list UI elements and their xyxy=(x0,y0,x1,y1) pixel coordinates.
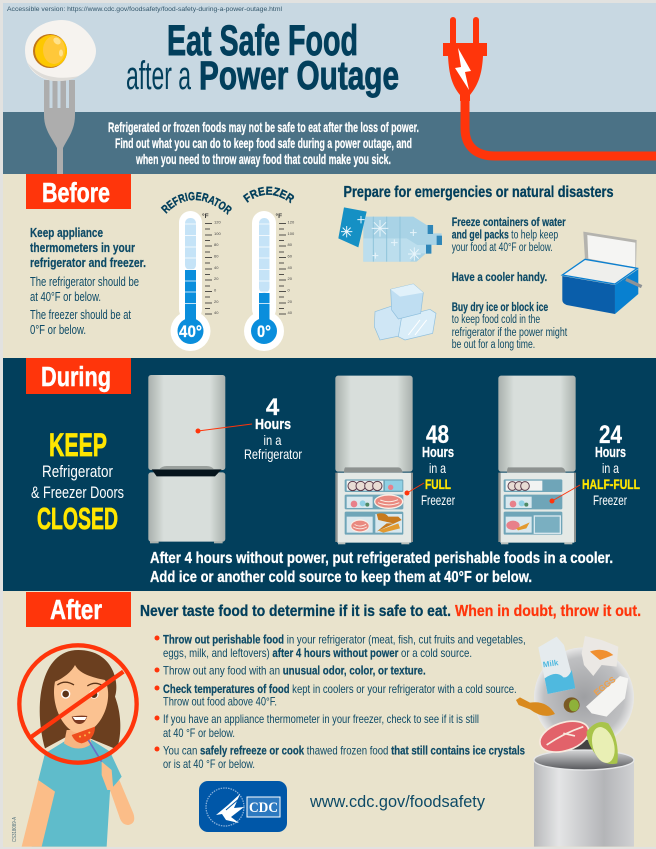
callout: 24 hours half-full freezer: Freezer xyxy=(593,492,627,508)
fish xyxy=(516,697,555,716)
chart: freezer thermometer: °F xyxy=(276,212,282,220)
chart: freezer thermometer: 100 xyxy=(288,231,295,236)
heading: never taste food: Never taste food to determine if it is safe to eat. xyxy=(140,603,451,620)
callout: 48 hours full freezer: FULL xyxy=(425,476,451,492)
illustration: full freezer xyxy=(335,376,413,544)
list: after guidance: Throw out perishable food in your refrigerator (meat, fish, cut fruits and vegetables, xyxy=(163,632,526,646)
text: after 4 hours: Add ice or another cold source to keep them at 40°F or below. xyxy=(150,569,532,586)
icon: frozen bottles and gel pack xyxy=(338,207,442,262)
icon: power plug xyxy=(443,17,656,156)
list: after guidance: If you have an appliance thermometer in your freezer, check to see if it is still xyxy=(163,712,479,726)
callout: 4 hours refrigerator: 4 xyxy=(266,394,280,421)
title: Eat Safe Food xyxy=(167,17,358,65)
link: website: www.cdc.gov/foodsafety xyxy=(309,792,485,811)
heading tab: during: During xyxy=(41,361,111,392)
chart: refrigerator thermometer: 60 xyxy=(214,254,219,258)
text: have a cooler handy: Have a cooler handy. xyxy=(452,270,547,284)
milk carton: Milk xyxy=(542,658,560,669)
callout: 24 hours half-full freezer: 24 xyxy=(599,421,622,449)
chart: refrigerator thermometer: 80 xyxy=(214,242,219,247)
chart: freezer thermometer: FREEZER xyxy=(242,186,294,204)
text: buy dry ice xyxy=(452,302,568,351)
icon: ice cubes xyxy=(374,284,436,340)
illustration: closed refrigerator xyxy=(148,375,225,543)
list: after guidance: at 40 °F or below. xyxy=(163,726,235,740)
intro text: when you need to throw away food that could make you sick. xyxy=(135,151,391,167)
chart: refrigerator thermometer: 20 xyxy=(214,276,219,281)
icon: fork xyxy=(44,80,75,174)
callout: 24 hours half-full freezer xyxy=(550,421,640,508)
intro text: Find out what you can do to keep food safe during a power outage, and xyxy=(115,135,412,151)
text: freeze containers xyxy=(452,217,566,254)
callout: 4 hours refrigerator xyxy=(196,394,302,462)
milk carton xyxy=(538,637,575,694)
takeout box xyxy=(582,636,618,676)
text: buy dry ice: to keep food cold in the xyxy=(452,314,540,326)
text: freeze containers: Freeze containers of water xyxy=(452,217,566,229)
chart: refrigerator thermometer: 20 xyxy=(214,299,219,304)
callout: 48 hours full freezer: 48 xyxy=(426,421,449,449)
callout: 48 hours full freezer xyxy=(404,421,455,508)
title: Power Outage xyxy=(199,54,399,98)
callout: 4 hours refrigerator: in a xyxy=(264,432,282,448)
chart: freezer thermometer: 60 xyxy=(288,254,293,258)
text: keep doors closed: & Freezer Doors xyxy=(31,483,124,502)
text: keep doors closed: CLOSED xyxy=(37,501,118,536)
text: freeze containers: your food at 40°F or below. xyxy=(452,242,553,254)
list: after guidance: You can safely refreeze or cook thawed frozen food that still contains ice crystals xyxy=(163,744,525,758)
text: buy dry ice: Buy dry ice or block ice xyxy=(452,302,548,314)
text: keep appliance thermometers xyxy=(30,226,146,337)
text: buy dry ice: be out for a long time. xyxy=(452,339,535,351)
chart: freezer thermometer: 40 xyxy=(288,310,293,315)
text: keep doors closed xyxy=(31,427,124,536)
chart: refrigerator thermometer xyxy=(160,192,232,351)
text: keep appliance thermometers: The refrigerator should be xyxy=(30,275,139,289)
illustration: trash can with food: EGGS xyxy=(592,674,618,698)
panel: during xyxy=(3,358,656,591)
heading tab: before: Before xyxy=(42,177,110,208)
chart: freezer thermometer: 40 xyxy=(288,265,293,270)
text: buy dry ice: refrigerator if the power might xyxy=(452,327,568,339)
callout: 4 hours refrigerator: Hours xyxy=(255,416,291,433)
list: after guidance: Throw out food above 40°F. xyxy=(163,694,277,708)
text: keep appliance thermometers: at 40°F or below. xyxy=(30,290,101,304)
chart: refrigerator thermometer: REFRIGERATOR xyxy=(160,192,232,215)
code: publication number: CS318089-A xyxy=(12,816,18,842)
text: keep doors closed: Refrigerator xyxy=(42,462,113,481)
illustration: woman with no-eating sign xyxy=(19,645,137,847)
text: keep doors closed: KEEP xyxy=(49,427,107,463)
text: keep appliance thermometers: Keep appliance xyxy=(30,226,103,240)
list: after guidance xyxy=(154,632,526,771)
heading tab: after: After xyxy=(50,594,102,625)
kiwi xyxy=(564,697,580,713)
intro text: Refrigerated or frozen foods may not be safe to eat after the loss of power. xyxy=(108,119,419,135)
callout: 24 hours half-full freezer: Hours xyxy=(595,444,626,461)
callout: 4 hours refrigerator: Refrigerator xyxy=(244,446,302,462)
illustration: trash can with food xyxy=(516,636,634,847)
chart: freezer thermometer: 80 xyxy=(288,242,293,247)
panel: before xyxy=(3,174,656,358)
chart: refrigerator thermometer: 0 xyxy=(214,288,217,292)
chart: freezer thermometer: 20 xyxy=(288,276,293,281)
chart: refrigerator thermometer: 40 xyxy=(214,265,219,270)
intro text xyxy=(108,119,419,167)
chart: freezer thermometer: 120 xyxy=(288,220,295,224)
list: after guidance: or is at 40 °F or below. xyxy=(163,757,255,771)
chart: refrigerator thermometer: 40° xyxy=(179,322,202,341)
panel: header xyxy=(3,3,656,174)
callout: 48 hours full freezer: Hours xyxy=(422,444,454,461)
heading tab: after xyxy=(26,592,131,627)
egg carton xyxy=(586,676,628,717)
text: keep appliance thermometers: 0°F or below. xyxy=(30,323,86,337)
text: keep appliance thermometers: The freezer should be at xyxy=(30,308,131,322)
text: freeze containers: and gel packs to help keep xyxy=(452,230,558,242)
logo: CDC: CDC xyxy=(249,800,278,816)
illustration: half-full freezer xyxy=(498,376,576,544)
icon: fried egg xyxy=(25,20,96,81)
cabbage xyxy=(587,722,618,764)
callout: 48 hours full freezer: in a xyxy=(429,460,446,476)
chart: freezer thermometer: 0 xyxy=(288,288,290,292)
callout: 48 hours full freezer: Freezer xyxy=(421,492,455,508)
list: after guidance: Throw out any food with an unusual odor, color, or texture. xyxy=(163,664,426,678)
accessible version link: Accessible version: https://www.cdc.gov/foodsafety/food-safety-during-a-power-outage.html xyxy=(7,6,282,13)
panel: after xyxy=(3,591,656,847)
list: after guidance: Check temperatures of food kept in coolers or your refrigerator with a cold source. xyxy=(163,682,517,696)
icon: cooler xyxy=(562,232,642,314)
chart: freezer thermometer xyxy=(242,186,295,351)
chart: refrigerator thermometer: °F xyxy=(202,212,209,220)
text: keep appliance thermometers: thermometers in your xyxy=(30,241,135,255)
title: after a xyxy=(126,54,191,98)
steak xyxy=(536,716,593,758)
callout: 24 hours half-full freezer: in a xyxy=(602,460,619,476)
logo: CDC xyxy=(199,781,287,832)
title xyxy=(126,17,399,98)
chart: refrigerator thermometer: 100 xyxy=(214,231,221,236)
text: keep appliance thermometers: refrigerator and freezer. xyxy=(30,256,146,270)
chart: freezer thermometer: 20 xyxy=(288,299,293,304)
text: after 4 hours xyxy=(150,550,613,586)
list: after guidance: eggs, milk, and leftovers) after 4 hours without power or a cold source. xyxy=(163,646,472,660)
chart: refrigerator thermometer: 120 xyxy=(214,220,221,224)
chart: refrigerator thermometer: 40 xyxy=(214,310,219,315)
chart: freezer thermometer: 0° xyxy=(257,322,271,341)
